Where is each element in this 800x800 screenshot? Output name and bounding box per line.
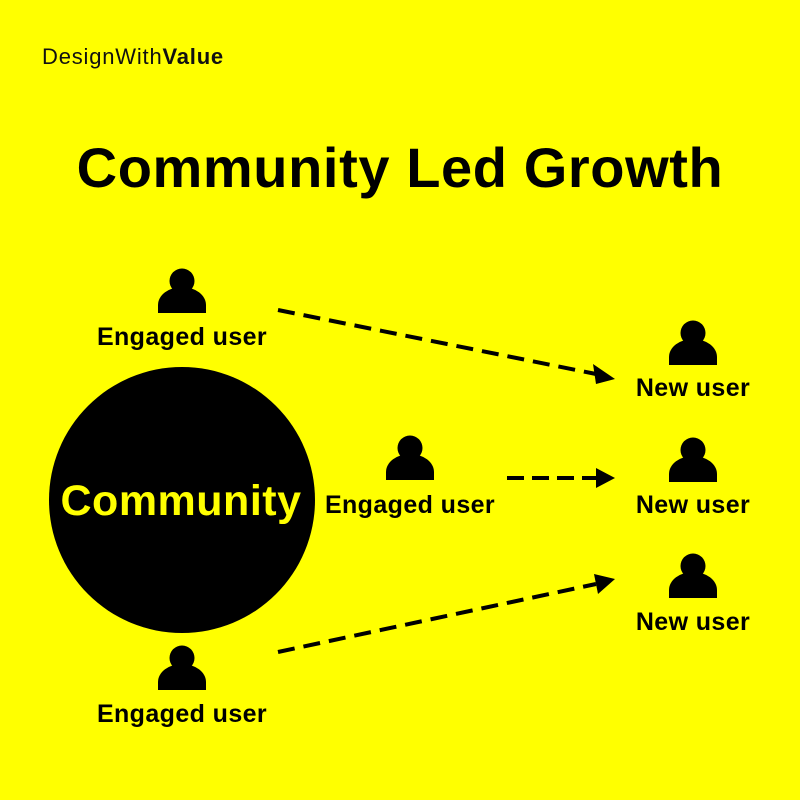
new user 2 xyxy=(636,438,750,519)
arrow top xyxy=(278,310,615,384)
engaged user top: Engaged user xyxy=(97,323,267,351)
title: Community Led Growth xyxy=(77,136,723,199)
engaged user bottom: Engaged user xyxy=(97,700,267,728)
engaged user middle xyxy=(325,436,495,519)
new user 2: New user xyxy=(636,491,750,519)
community circle: Community xyxy=(60,477,302,525)
engaged user top xyxy=(97,268,267,351)
engaged user bottom xyxy=(97,646,267,728)
arrow bottom xyxy=(278,574,615,652)
new user 3 xyxy=(636,554,750,636)
new user 1 xyxy=(636,320,750,402)
new user 1: New user xyxy=(636,374,750,402)
logo: DesignWithValue xyxy=(42,44,224,69)
community circle xyxy=(49,367,315,633)
engaged user middle: Engaged user xyxy=(325,491,495,519)
new user 3: New user xyxy=(636,608,750,636)
arrow middle xyxy=(507,468,615,488)
